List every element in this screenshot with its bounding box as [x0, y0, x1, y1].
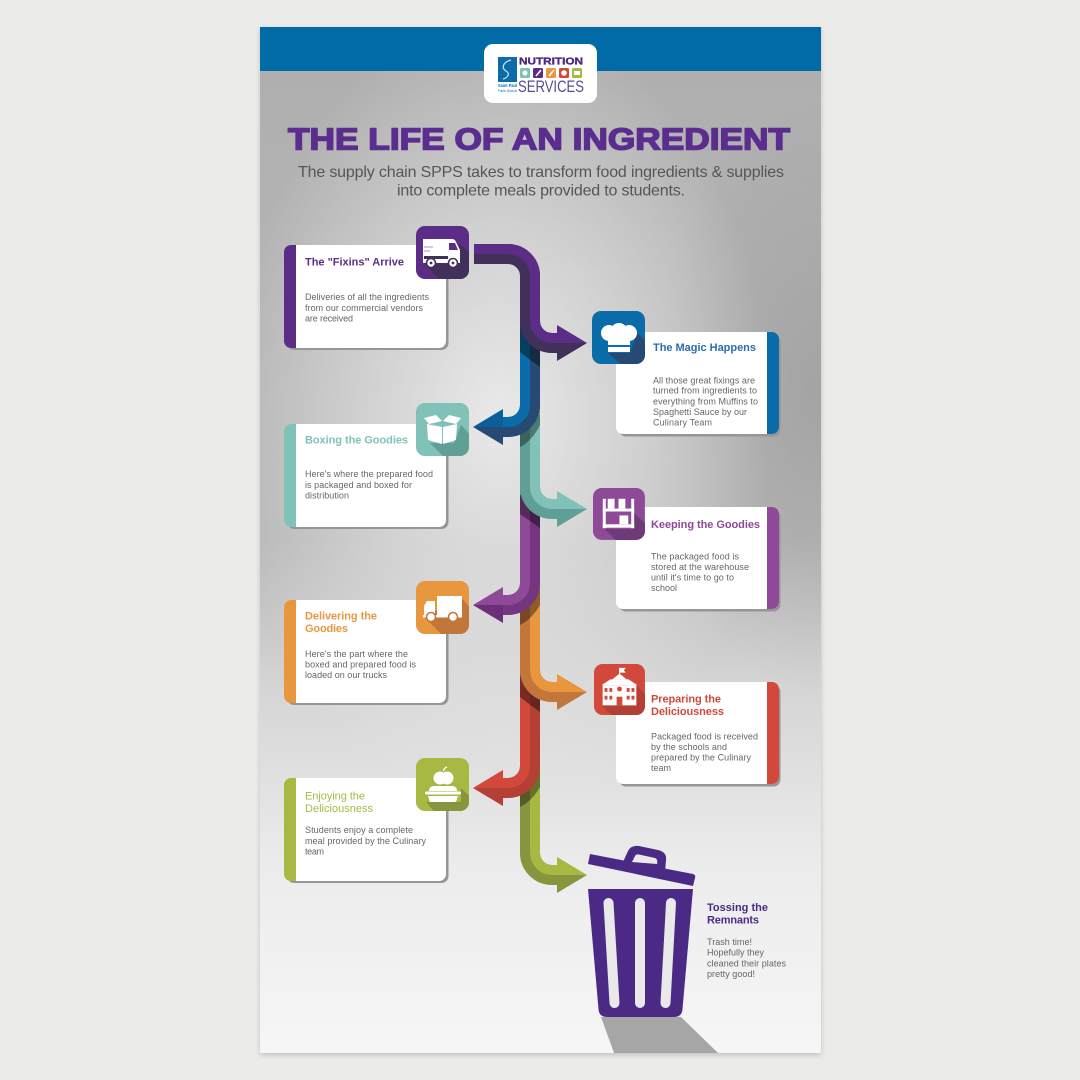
- logo: SERVICES: [518, 78, 584, 96]
- panel: Keeping the Goodies: until it's time to go to: [651, 572, 734, 582]
- arrow: first purple: [474, 249, 587, 361]
- panel: Preparing the Deliciousness: Deliciousness: [651, 706, 724, 718]
- panel: The Magic Happens: The Magic Happens: [653, 342, 756, 354]
- text: Tossing the Remnants: Tossing the: [707, 902, 768, 914]
- panel: The Magic Happens: Spaghetti Sauce by our: [653, 407, 747, 417]
- panel: The Magic Happens: [616, 332, 780, 436]
- arrow: violet: [473, 487, 540, 623]
- text: Tossing the Remnants: Hopefully they: [707, 948, 764, 958]
- panel: Enjoying the Deliciousness: Deliciousness: [305, 803, 374, 815]
- panel: Preparing the Deliciousness: Packaged food is received: [651, 731, 758, 741]
- title: THE LIFE OF AN INGREDIENT: [288, 122, 790, 156]
- panel: Boxing the Goodies: Here's where the prepared food: [305, 469, 433, 479]
- panel: Boxing the Goodies: distribution: [305, 490, 349, 500]
- icon: apple and lunch box: [416, 758, 469, 811]
- panel: Delivering the Goodies: Delivering the: [305, 610, 377, 622]
- panel: The Magic Happens: turned from ingredients to: [653, 386, 757, 396]
- panel: Boxing the Goodies: Boxing the Goodies: [305, 434, 408, 446]
- subtitle: [298, 164, 784, 200]
- header band: [260, 27, 821, 71]
- text: Tossing the Remnants: Trash time!: [707, 937, 752, 947]
- icon: open box: [416, 403, 469, 456]
- panel: The Fixins Arrive: from our commercial vendors: [305, 303, 424, 313]
- text: Tossing the Remnants: Remnants: [707, 914, 759, 926]
- panel: Boxing the Goodies: is packaged and boxed for: [305, 480, 412, 490]
- text: Tossing the Remnants: cleaned their plates: [707, 958, 786, 968]
- subtitle: The supply chain SPPS takes to transform food ingredients & supplies: [298, 164, 784, 181]
- logo: NUTRITION: [519, 56, 583, 68]
- panel: Preparing the Deliciousness: team: [651, 763, 671, 773]
- logo: Public Schools: [498, 89, 517, 93]
- panel: Enjoying the Deliciousness: team: [305, 846, 324, 856]
- panel: The Fixins Arrive: Deliveries of all the ingredients: [305, 292, 430, 302]
- panel: Enjoying the Deliciousness: Students enjoy a complete: [305, 825, 413, 835]
- panel: Preparing the Deliciousness: prepared by the Culinary: [651, 752, 752, 762]
- panel: Delivering the Goodies: boxed and prepared food is: [305, 660, 416, 670]
- panel: Preparing the Deliciousness: [616, 682, 780, 786]
- panel: The Magic Happens: everything from Muffins to: [653, 396, 758, 406]
- panel: Preparing the Deliciousness: Preparing the: [651, 694, 721, 706]
- text: Tossing the Remnants: [707, 902, 786, 979]
- arrow: orange: [520, 583, 587, 710]
- panel: Keeping the Goodies: school: [651, 583, 677, 593]
- panel: The Fixins Arrive: The "Fixins" Arrive: [305, 256, 404, 268]
- panel: Delivering the Goodies: [284, 600, 448, 705]
- icon: warehouse shelves: [593, 488, 645, 540]
- panel: The Magic Happens: Culinary Team: [653, 417, 712, 427]
- panel: Enjoying the Deliciousness: [284, 778, 448, 883]
- subtitle: into complete meals provided to students.: [397, 182, 685, 200]
- panel: Delivering the Goodies: loaded on our trucks: [305, 670, 388, 680]
- text: Tossing the Remnants: pretty good!: [707, 969, 755, 979]
- logo: [484, 44, 597, 103]
- icon: box truck: [416, 581, 469, 634]
- icon: chef hat: [592, 311, 645, 364]
- panel: Keeping the Goodies: The packaged food is: [651, 551, 740, 561]
- arrow: olive to trash: [520, 766, 587, 893]
- panel: The Fixins Arrive: [284, 245, 448, 350]
- panel: Keeping the Goodies: stored at the warehouse: [651, 562, 749, 572]
- panel: The Magic Happens: All those great fixings are: [653, 375, 755, 385]
- panel: Keeping the Goodies: Keeping the Goodies: [651, 519, 760, 531]
- arrow: blue: [473, 318, 540, 445]
- panel: Enjoying the Deliciousness: meal provided by the Culinary: [305, 836, 426, 846]
- logo: Saint Paul: [498, 83, 517, 88]
- panel: Delivering the Goodies: Goodies: [305, 623, 348, 635]
- panel: Boxing the Goodies: [284, 424, 448, 529]
- panel: Preparing the Deliciousness: by the schools and: [651, 742, 727, 752]
- icon: trash can: [588, 846, 718, 1053]
- panel: Keeping the Goodies: [616, 507, 780, 612]
- icon: delivery van: [416, 226, 469, 279]
- background panel: [260, 27, 821, 1053]
- panel: Enjoying the Deliciousness: Enjoying the: [305, 790, 365, 802]
- icon: school: [594, 664, 645, 715]
- panel: The Fixins Arrive: are received: [305, 314, 353, 324]
- arrow: red: [473, 670, 540, 806]
- panel: Delivering the Goodies: Here's the part where the: [305, 649, 408, 659]
- arrow: teal: [520, 405, 587, 527]
